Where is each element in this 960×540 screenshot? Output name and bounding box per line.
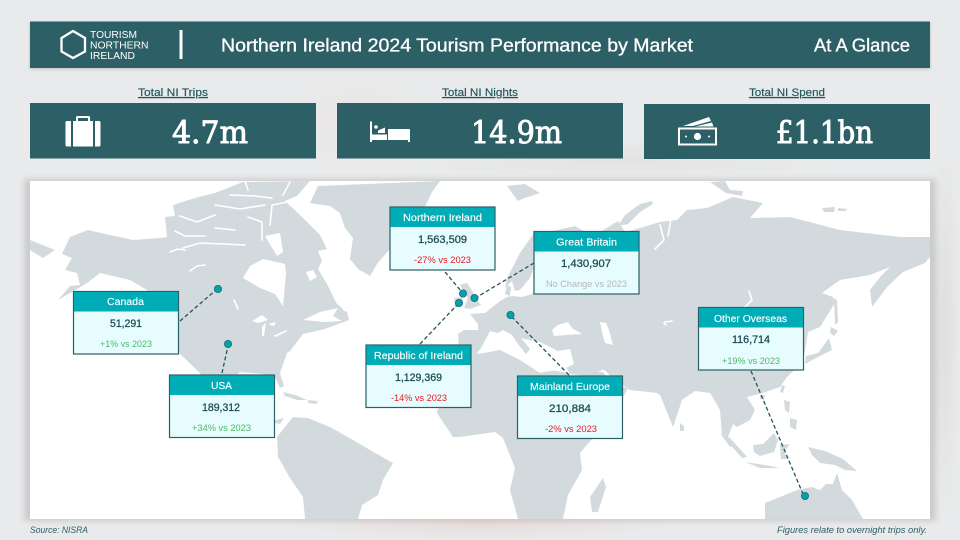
Foxe Basin and Ungava: [265, 233, 317, 281]
icon: bed: [370, 122, 410, 142]
callout: USA: 189,312: [202, 402, 240, 414]
Arctic channels: [175, 181, 293, 248]
Great Lakes: [252, 315, 287, 337]
callout: Canada: +1% vs 2023: [100, 339, 152, 350]
logo: Tourism Northern Ireland: NORTHERN: [90, 40, 148, 52]
callout: USA: [170, 375, 274, 438]
callout: USA: +34% vs 2023: [192, 423, 251, 434]
callout: Great Britain: 1,430,907: [561, 258, 611, 270]
callout: Mainland Europe: Mainland Europe: [530, 381, 610, 393]
Red Sea: [571, 375, 590, 402]
logo: Tourism Northern Ireland: IRELAND: [90, 51, 135, 62]
callout: Northern Ireland: -27% vs 2023: [414, 255, 471, 266]
Chukotka tip: [30, 240, 55, 258]
Eurasia: [458, 197, 930, 447]
footnote: Figures relate to overnight trips only.: [777, 525, 927, 535]
callout: Republic of Ireland: [366, 345, 471, 408]
callout: Canada: 51,291: [110, 318, 142, 330]
Black Sea: [552, 322, 582, 336]
Italy: [512, 335, 530, 354]
callout: Republic of Ireland: -14% vs 2023: [391, 393, 447, 404]
logo: Tourism Northern Ireland: TOURISM: [90, 30, 137, 41]
Persian Gulf: [601, 369, 610, 376]
Ireland: [454, 297, 463, 308]
Australia: [765, 473, 863, 519]
KPI label: Total NI Spend: [749, 87, 825, 99]
Java: [745, 462, 780, 468]
callout: Other Overseas: 116,714: [732, 334, 770, 346]
header banner: [30, 22, 930, 69]
location pins: [214, 285, 809, 500]
Great Bear, Great Slave, Winnipeg, Baikal, Balkhash: [170, 249, 752, 325]
callout: Republic of Ireland: Republic of Ireland: [374, 350, 463, 362]
callout: Northern Ireland: 1,563,509: [418, 234, 467, 246]
Sri Lanka, Hainan: [680, 395, 765, 431]
Cuba and Caribbean: [283, 392, 318, 404]
source note: Source: NISRA: [30, 525, 88, 535]
KPI: Total NI Spend: [644, 87, 930, 159]
KPI value: £1.1bn: [776, 115, 873, 151]
callout: Mainland Europe: [518, 376, 622, 438]
callout: Northern Ireland: Northern Ireland: [403, 212, 482, 224]
Taiwan, Philippines: [780, 385, 797, 430]
KPI: Total NI Trips: [30, 87, 316, 158]
Sakhalin, Hokkaido, Honshu: [805, 298, 838, 364]
subtitle: At A Glance: At A Glance: [814, 36, 910, 56]
Baltic: [519, 296, 520, 297]
New Guinea: [808, 447, 857, 471]
Denmark: [505, 285, 511, 296]
callout: Canada: Canada: [107, 296, 144, 308]
KPI label: Total NI Trips: [138, 87, 209, 99]
connector lines: [180, 263, 803, 494]
Gulf of St Lawrence: [303, 308, 342, 322]
icon: suitcase: [66, 116, 100, 146]
KPI value: 4.7m: [172, 115, 248, 151]
Arabia: [588, 372, 628, 397]
Greenland: [310, 181, 440, 276]
Madagascar: [590, 478, 606, 512]
North America: [58, 181, 349, 424]
callout: Great Britain: [534, 232, 639, 294]
Africa: [437, 350, 592, 519]
KPI: Total NI Nights: [337, 87, 623, 158]
icon: banknotes: [679, 117, 716, 144]
Newfoundland: [344, 310, 349, 320]
logo: Tourism Northern Ireland: [62, 30, 148, 62]
callout: Other Overseas: +19% vs 2023: [722, 356, 780, 367]
callout: Canada: [74, 292, 178, 354]
South America: [277, 417, 393, 519]
world map land: [30, 181, 930, 519]
title: Northern Ireland 2024 Tourism Performance by Market: [221, 36, 693, 56]
KPI label: Total NI Nights: [442, 87, 519, 99]
Novaya Zemlya: [618, 201, 653, 226]
Scandinavia: [505, 234, 534, 291]
callout: Great Britain: No Change vs 2023: [546, 279, 627, 290]
callout: Great Britain: Great Britain: [556, 236, 617, 248]
Svalbard: [507, 184, 540, 201]
Severnaya Zemlya: [710, 181, 743, 196]
seas and lakes: [169, 181, 753, 376]
callout: USA: USA: [211, 380, 232, 392]
callout: Mainland Europe: 210,884: [549, 403, 591, 415]
Borneo: [753, 433, 778, 456]
callout: Mainland Europe: -2% vs 2023: [545, 424, 597, 435]
Sumatra: [720, 433, 747, 458]
panel: world map: [30, 181, 930, 519]
New Siberian Islands: [822, 207, 848, 212]
callout: Republic of Ireland: 1,129,369: [395, 372, 442, 384]
Hudson Bay: [243, 259, 286, 306]
callout: Other Overseas: Other Overseas: [714, 313, 787, 325]
Great Britain: [460, 283, 481, 309]
Mediterranean: [477, 330, 574, 372]
callout: Northern Ireland: [390, 207, 495, 270]
KPI value: 14.9m: [471, 115, 562, 151]
Sulawesi: [780, 444, 790, 459]
callout: Other Overseas: [698, 308, 804, 370]
Caspian Sea: [600, 322, 613, 345]
Sea of Japan: [808, 328, 829, 350]
